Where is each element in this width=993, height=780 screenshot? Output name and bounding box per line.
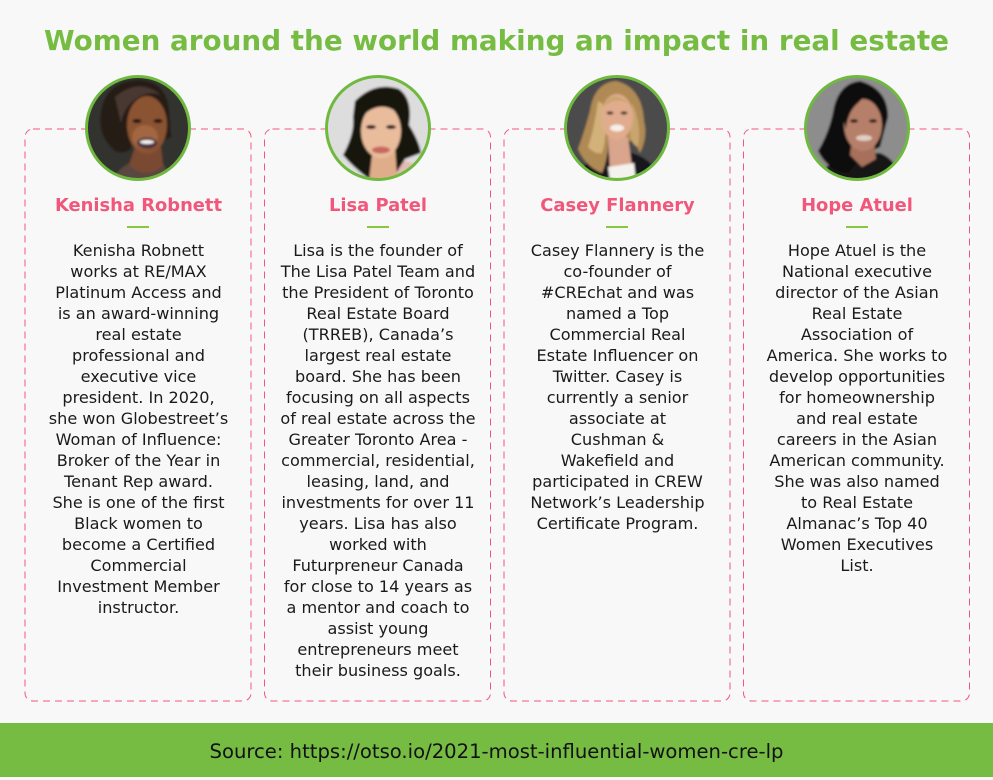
text block: biography: executive vice [81, 367, 196, 386]
text block: biography: named a Top [566, 304, 669, 323]
text block: biography: (TRREB), Canada’s [303, 325, 453, 344]
icon: portrait of Kenisha Robnett [85, 75, 191, 181]
text block: biography [280, 241, 476, 680]
text block: biography: to Real Estate [801, 493, 913, 512]
text block: biography: a mentor and coach to [287, 598, 469, 617]
text block: biography: works at RE/MAX [70, 262, 207, 281]
text block: biography: real estate [95, 325, 182, 344]
text block: biography: board. She has been [295, 367, 461, 386]
footer: source [0, 723, 993, 777]
text block: biography: years. Lisa has also [299, 514, 457, 533]
text block: biography: Hope Atuel is the [788, 241, 926, 260]
text block: biography: for homeownership [779, 388, 935, 407]
text block: biography: careers in the Asian [777, 430, 937, 449]
text block: biography: Commercial [90, 556, 187, 575]
heading: name: Hope Atuel [801, 195, 913, 216]
text block: biography: Real Estate Board [306, 304, 450, 323]
text block: biography: Cushman & [571, 430, 664, 449]
panel: Lisa Patel [280, 75, 476, 680]
divider rule [846, 226, 868, 228]
text block: biography: Casey Flannery is the [531, 241, 704, 260]
text block: biography: Commercial Real [549, 325, 686, 344]
text block: biography: Almanac’s Top 40 [786, 514, 928, 533]
text block: biography: She was also named [774, 472, 940, 491]
text block: biography [530, 241, 705, 533]
text block: biography: America. She works to [767, 346, 947, 365]
text block: biography: she won Globestreet’s [49, 409, 228, 428]
text block: biography: investments for over 11 [281, 493, 475, 512]
text block: biography: Kenisha Robnett [73, 241, 204, 260]
text block: biography: Futurpreneur Canada [292, 556, 464, 575]
footer: source: Source: https://otso.io/2021-most-influential-women-cre-lp [210, 740, 783, 763]
text block: biography: Greater Toronto Area - [289, 430, 467, 449]
text block: biography: currently a senior [547, 388, 688, 407]
text block: biography: develop opportunities [769, 367, 945, 386]
text block: biography [49, 241, 228, 617]
text block: biography: for close to 14 years as [284, 577, 472, 596]
text block: biography: Real Estate [812, 304, 902, 323]
text block: biography: Women Executives [781, 535, 933, 554]
text block: biography: Tenant Rep award. [64, 472, 213, 491]
text block: biography: president. In 2020, [62, 388, 215, 407]
icon: portrait of Lisa Patel [325, 75, 431, 181]
text block: biography: worked with [329, 535, 427, 554]
text block: biography: Lisa is the founder of [293, 241, 463, 260]
text block: biography: Investment Member [57, 577, 220, 596]
text block: biography: Network’s Leadership [530, 493, 705, 512]
text block: biography: Black women to [74, 514, 203, 533]
text block: biography: instructor. [98, 598, 179, 617]
divider rule [127, 226, 149, 228]
text block: biography: commercial, residential, [281, 451, 475, 470]
text block: biography: focusing on all aspects [286, 388, 470, 407]
text block: biography: List. [840, 556, 874, 575]
text block: biography: Estate Influencer on [537, 346, 698, 365]
icon: portrait of Hope Atuel [804, 75, 910, 181]
heading: name: Casey Flannery [540, 195, 695, 216]
panel: Kenisha Robnett [49, 75, 228, 617]
text block: biography: become a Certified [62, 535, 215, 554]
text block: biography [766, 241, 947, 575]
text block: biography: the President of Toronto [282, 283, 474, 302]
text block: biography: Platinum Access and [55, 283, 222, 302]
text block: biography: Twitter. Casey is [553, 367, 682, 386]
text block: biography: is an award-winning [58, 304, 219, 323]
text block: biography: co-founder of [563, 262, 672, 281]
text block: biography: participated in CREW [532, 472, 703, 491]
text block: biography: American community. [769, 451, 945, 470]
text block: biography: Broker of the Year in [57, 451, 220, 470]
icon: portrait of Casey Flannery [564, 75, 670, 181]
text block: biography: leasing, land, and [306, 472, 450, 491]
text block: biography: National executive [782, 262, 932, 281]
divider rule [606, 226, 628, 228]
heading: name: Kenisha Robnett [55, 195, 222, 216]
text block: biography: Woman of Influence: [56, 430, 221, 449]
text block: biography: Wakefield and [561, 451, 674, 470]
text block: biography: their business goals. [295, 661, 461, 680]
panel: Casey Flannery [530, 75, 705, 533]
text block: biography: associate at [569, 409, 666, 428]
text block: biography: entrepreneurs meet [297, 640, 459, 659]
panel: Hope Atuel [766, 75, 947, 575]
divider rule [366, 226, 388, 228]
heading: name: Lisa Patel [329, 195, 427, 216]
text block: biography: #CREchat and was [541, 283, 694, 302]
text block: biography: The Lisa Patel Team and [281, 262, 475, 281]
text block: biography: She is one of the first [52, 493, 225, 512]
text block: biography: assist young [328, 619, 428, 638]
text block: biography: largest real estate [305, 346, 451, 365]
text block: biography: Association of [801, 325, 913, 344]
text block: biography: director of the Asian [775, 283, 939, 302]
title: Women around the world making an impact in real estate [44, 24, 949, 57]
text block: biography: professional and [72, 346, 205, 365]
text block: biography: and real estate [796, 409, 918, 428]
text block: biography: Certificate Program. [537, 514, 698, 533]
text block: biography: of real estate across the [280, 409, 476, 428]
